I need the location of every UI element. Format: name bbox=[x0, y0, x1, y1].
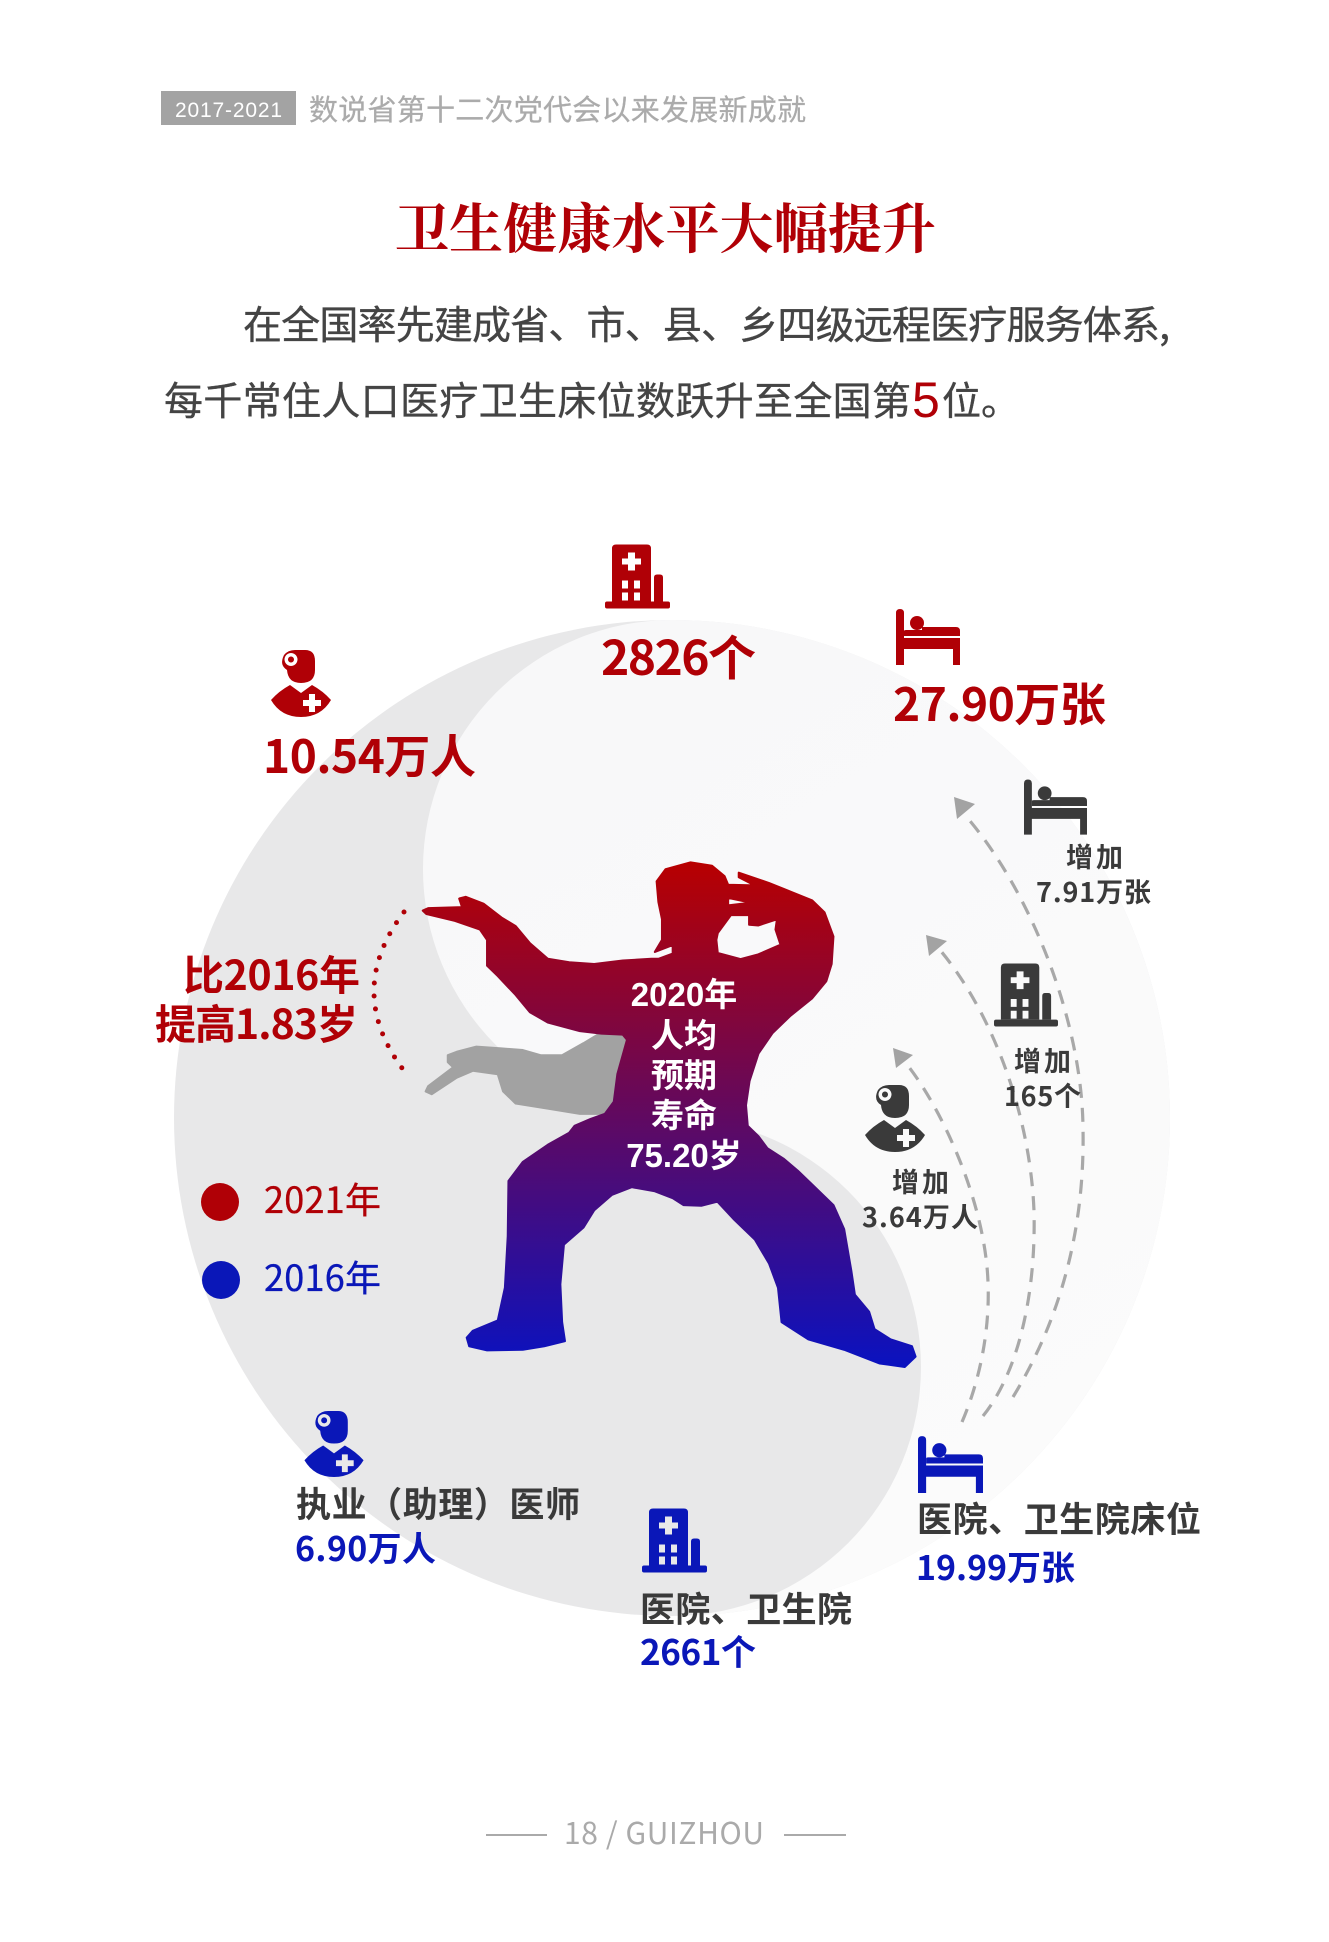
increase: beds: 7.91万张 bbox=[1036, 871, 1151, 910]
intro paragraph: 在全国率先建成省、市、县、乡四级远程医疗服务体系, bbox=[243, 295, 1170, 351]
increase: physicians: 增加 bbox=[892, 1161, 949, 1200]
stat 2021: hospitals: 2826个 bbox=[601, 619, 756, 689]
yin-yang background circle bbox=[174, 620, 1170, 1616]
life expectancy text: 75.20岁 bbox=[626, 1137, 742, 1174]
callout: increase since 2016: 比2016年 bbox=[183, 942, 360, 1002]
stat 2016: physicians bbox=[295, 1411, 580, 1571]
stat 2016: beds bbox=[916, 1436, 1201, 1590]
title: 卫生健康水平大幅提升 bbox=[395, 187, 936, 264]
legend: 2016年 bbox=[264, 1250, 381, 1302]
legend: 2021年 bbox=[264, 1172, 381, 1224]
growth arrows bbox=[905, 815, 1083, 1422]
life expectancy text: 预期 bbox=[651, 1057, 717, 1094]
increase: hospitals: 165个 bbox=[1004, 1075, 1081, 1114]
stat 2021: hospitals bbox=[601, 544, 756, 689]
arrowheads bbox=[893, 797, 975, 1068]
stat 2016: physicians: 6.90万人 bbox=[295, 1522, 436, 1571]
stat 2016: hospitals bbox=[640, 1508, 852, 1676]
life expectancy text bbox=[626, 976, 742, 1174]
increase: physicians: 3.64万人 bbox=[862, 1196, 978, 1235]
intro paragraph: 5 bbox=[912, 372, 940, 428]
increase: physicians bbox=[862, 1085, 978, 1235]
header badge: 2017-2021 bbox=[161, 91, 296, 125]
increase: beds: 增加 bbox=[1066, 836, 1123, 875]
intro paragraph: 每千常住人口医疗卫生床位数跃升至全国第 bbox=[164, 371, 911, 427]
stat 2021: physicians bbox=[263, 650, 476, 787]
stat 2021: beds bbox=[893, 609, 1106, 735]
2016 arm in grey bbox=[426, 1035, 627, 1114]
callout: increase since 2016: 提高1.83岁 bbox=[155, 991, 358, 1051]
life expectancy text: 人均 bbox=[651, 1017, 717, 1054]
stat 2021: physicians: 10.54万人 bbox=[263, 721, 476, 787]
legend bbox=[201, 1172, 381, 1302]
footer page number: 18 / GUIZHOU bbox=[564, 1809, 764, 1853]
intro paragraph: 位。 bbox=[942, 371, 1020, 427]
stat 2016: hospitals: 2661个 bbox=[640, 1625, 756, 1676]
life expectancy text: 寿命 bbox=[651, 1097, 717, 1134]
stat 2016: beds: 19.99万张 bbox=[916, 1541, 1075, 1590]
dotted bracket bbox=[374, 912, 404, 1068]
stat 2021: beds: 27.90万张 bbox=[893, 669, 1106, 735]
stat 2016: hospitals: 医院、卫生院 bbox=[640, 1582, 852, 1633]
life expectancy text: 2020年 bbox=[631, 976, 737, 1013]
intro paragraph bbox=[164, 295, 1170, 428]
stat 2016: physicians: 执业（助理）医师 bbox=[296, 1477, 580, 1528]
header subtitle: 数说省第十二次党代会以来发展新成就 bbox=[309, 87, 806, 129]
tai chi figure silhouette bbox=[423, 862, 916, 1367]
stat 2016: beds: 医院、卫生院床位 bbox=[917, 1492, 1201, 1543]
increase: hospitals: 增加 bbox=[1014, 1040, 1071, 1079]
increase: hospitals bbox=[994, 963, 1081, 1114]
increase: beds bbox=[1024, 779, 1151, 910]
header badge: 2017-2021: 2017-2021 bbox=[175, 99, 282, 122]
callout: increase since 2016 bbox=[155, 942, 360, 1051]
